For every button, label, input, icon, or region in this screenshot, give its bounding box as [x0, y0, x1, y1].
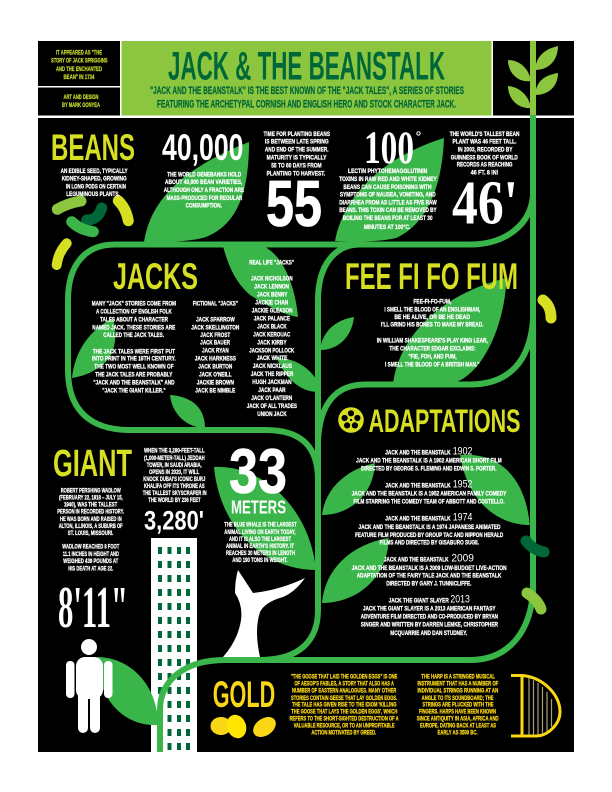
text: jeddah tower: TOWER, IN SAUDI ARABIA,: [147, 462, 202, 469]
heading: jacks: JACKS: [113, 256, 198, 297]
vine stem over tower: [160, 660, 240, 752]
list: real life jacks: JACK LENNON: [254, 284, 289, 291]
text: fee fi fo fum verse: [377, 298, 488, 369]
text: harp: [417, 674, 499, 737]
text: toxin: LECTIN PHYTOHEMAGGLUTININ: [348, 168, 427, 175]
icon: skyscraper: [151, 538, 197, 752]
stat: 46 feet: 46': [452, 169, 518, 237]
text: jeddah tower: WHEN THE 3,280-FEET-TALL: [144, 448, 205, 455]
text: adaptations list: DIRECTED BY GEORGE S. FLEMING AND EDWIN S. PORTER.: [361, 465, 496, 472]
text: adaptations list: 1974: [453, 512, 472, 524]
text: adaptations list: JACK AND THE BEANSTALK IS A 1902 AMERICAN SHORT FILM: [356, 457, 502, 464]
text: adaptations list: JACK THE GIANT SLAYER: [389, 598, 449, 605]
text: wadlow: ROBERT PERSHING WADLOW: [61, 487, 121, 494]
text: planting time: MATURITY IS TYPICALLY: [267, 154, 327, 161]
text: wadlow: 11.1 INCHES IN HEIGHT AND: [63, 551, 119, 558]
icon: film reel: [338, 407, 364, 433]
heading: fee fi fo fum: FEE FI FO FUM: [345, 256, 518, 297]
text: adaptations list: JACK AND THE BEANSTALK: [385, 482, 451, 489]
list: fictional jacks: JACKIE BROWN: [197, 380, 234, 387]
text: beans description: [61, 168, 128, 198]
text: planting time: IS BETWEEN LATE SPRING: [265, 139, 329, 146]
text: genebanks: ABOUT 40,000 BEAN VARIETIES,: [165, 179, 242, 186]
text: fee fi fo fum verse: I SMELL THE BLOOD OF AN ENGLISHMAN,: [384, 306, 480, 313]
text: blue whale: [224, 522, 297, 564]
list: real life jacks: JACK BENNY: [257, 292, 288, 299]
list: real life jacks: JACKIE GLEASON: [252, 308, 292, 315]
label: meters: METERS: [231, 496, 286, 517]
list: real life jacks: JACK NICHOLSON: [251, 276, 293, 283]
text: adaptations list: [352, 445, 507, 637]
text: blue whale: AND 190 TONS IN WEIGHT.: [232, 557, 287, 564]
panel: story note: STORY OF JACK SPRIGGINS: [51, 58, 108, 64]
heading: beans: BEANS: [51, 127, 135, 168]
text: tallest bean: 46 FT. 8 IN!: [471, 169, 498, 176]
text: jeddah tower: [143, 448, 207, 504]
text: jack tales: MANY "JACK" STORIES COME FROM: [92, 301, 176, 308]
text: golden goose: ACTION MOTIVATED BY GREED.: [311, 730, 376, 737]
panel: title header: [122, 41, 492, 116]
text: harp: EUROPE, DATING BACK AT LEAST AS: [420, 723, 496, 730]
list: fictional jacks: [191, 301, 239, 395]
text: adaptations list: FILMS AND DIRECTED BY GISABURO SUGII.: [380, 540, 479, 547]
list: real life jacks: HUGH JACKMAN: [252, 379, 292, 386]
text: tallest bean: GUINNESS BOOK OF WORLD: [451, 154, 518, 161]
stat: 40,000: 40,000: [162, 127, 244, 168]
list: real life jacks: JACK WHITE: [257, 355, 288, 362]
stat: 33: 33: [229, 437, 287, 507]
text: golden goose: NUMBER OF EASTERN ANALOGUES. MANY OTHER: [292, 688, 396, 695]
heading: gold: GOLD: [213, 674, 275, 715]
text: jeddah tower: (1,000-METER-TALL) JEDDAH: [144, 455, 205, 462]
list: real life jacks: [247, 260, 297, 418]
stat: 55: 55: [266, 167, 322, 240]
text: adaptations list: JACK AND THE BEANSTALK: [385, 449, 451, 456]
text: genebanks: [164, 172, 244, 210]
list: real life jacks: JACK THE RIPPER: [251, 371, 293, 378]
heading: adaptations: ADAPTATIONS: [368, 403, 520, 439]
list: fictional jacks: JACK FROST: [200, 332, 231, 339]
text: fee fi fo fum verse: "FIE, FOH, AND FUM,: [408, 353, 457, 360]
text: toxin: [339, 168, 437, 231]
text: wadlow: WADLOW REACHED 8 FOOT: [62, 544, 120, 551]
text: planting time: 55 TO 60 DAYS FROM: [271, 162, 322, 169]
text: adaptations list: FILM STARRING THE COMEDY TEAM OF ABBOTT AND COSTELLO.: [353, 499, 505, 506]
list: real life jacks: JACK NICKLAUS: [253, 363, 292, 370]
text: adaptations list: 2009: [451, 553, 474, 565]
text: genebanks: CONSUMPTION.: [186, 203, 222, 210]
text: toxin: MINUTES AT 100°C.: [364, 223, 410, 231]
text: genebanks: THE WORLD GENEBANKS HOLD: [167, 172, 241, 179]
text: adaptations list: JACK THE GIANT SLAYER IS A 2013 AMERICAN FANTASY: [363, 606, 496, 613]
stat: 3,280 feet: 3,280': [144, 506, 204, 536]
text: tallest bean: IN 2003, RECORDED BY: [458, 147, 513, 154]
text: wadlow: WEIGHED 439 POUNDS AT: [63, 558, 119, 565]
text: toxin: SYMPTOMS OF NAUSEA, VOMITING, AND: [340, 192, 436, 199]
text: blue whale: REACHES 30 METERS IN LENGTH: [226, 550, 295, 557]
text: golden goose: THE GOOSE THAT LAYS THE GOLDEN EGGS', WHICH: [291, 709, 397, 716]
text: jeddah tower: THE WORLD BY 236 FEET: [148, 497, 201, 504]
text: jack tales: "JACK THE GIANT KILLER.": [102, 388, 166, 395]
beans decoration: [57, 201, 551, 609]
text: golden goose: REFERS TO THE SHORT-SIGHTED DESTRUCTION OF A: [290, 716, 399, 723]
text: wadlow: PERSON IN RECORDED HISTORY.: [57, 509, 124, 516]
list: fictional jacks: JACK SKELLINGTON: [191, 324, 239, 331]
text: golden goose: "THE GOOSE THAT LAID THE GOLDEN EGGS" IS ONE: [291, 674, 398, 681]
icon: harp: [511, 676, 560, 736]
panel: credits: [38, 88, 120, 116]
text: fee fi fo fum verse: BE HE ALIVE, OR BE HE DEAD: [394, 314, 470, 321]
list: real life jacks: JACK BLACK: [257, 323, 287, 330]
text: beans description: LEGUMINOUS PLANTS.: [66, 191, 120, 198]
text: tallest bean: PLANT WAS 46 FEET TALL.: [452, 139, 517, 146]
text: toxin: BEANS. THIS TOXIN CAN BE REMOVED BY: [339, 207, 437, 214]
text: planting time: TIME FOR PLANTING BEANS: [264, 131, 330, 138]
text: harp: INSTRUMENT THAT HAS A NUMBER OF: [417, 681, 498, 688]
list: fictional jacks: JACK O'NEILL: [199, 372, 232, 379]
text: jeddah tower: THE TALLEST SKYSCRAPER IN: [143, 490, 207, 497]
text: adaptations list: JACK AND THE BEANSTALK IS A 2009 LOW-BUDGET LIVE-ACTION: [352, 565, 507, 572]
leaf behind person: [97, 657, 158, 725]
text: blue whale: ANIMAL LIVING ON EARTH TODAY,: [224, 529, 296, 536]
list: real life jacks: JACK OF ALL TRADES: [247, 403, 297, 410]
text: tallest bean: [450, 131, 519, 176]
text: adaptations list: FEATURE FILM PRODUCED BY GROUP TAC AND NIPPON HERALD: [355, 532, 503, 539]
icon: person: [66, 639, 112, 733]
text: harp: SINCE ANTIQUITY IN ASIA, AFRICA AND: [417, 716, 499, 723]
panel: credits: BY MARK GONYEA: [62, 102, 100, 109]
text: adaptations list: JACK AND THE BEANSTALK: [384, 557, 449, 564]
text: blue whale: AND IT IS ALSO THE LARGEST: [229, 536, 292, 543]
stat: 100 degrees: 100: [364, 122, 414, 174]
text: harp: THE HARP IS A STRINGED MUSICAL: [421, 674, 495, 681]
text: harp: ANGLE TO ITS SOUNDBOARD; THE: [422, 695, 494, 702]
text: golden goose: VALUABLE RESOURCE, OR TO AN UNPROFITABLE: [294, 723, 395, 730]
text: adaptations list: DIRECTED BY GARY J. TUNNICLIFFE.: [386, 581, 472, 588]
text: adaptations list: ADVENTURE FILM DIRECTED AND CO-PRODUCED BY BRYAN: [361, 614, 498, 621]
text: adaptations list: 1902: [453, 445, 472, 457]
text: planting time: AND END OF THE SUMMER.: [265, 147, 329, 154]
text: adaptations list: JACK AND THE BEANSTALK: [385, 516, 451, 523]
beanstalk vines: [68, 115, 533, 660]
text: harp: STRINGS ARE PLUCKED WITH THE: [422, 702, 494, 709]
text: beans description: IN LONG PODS ON CERTAIN: [66, 184, 126, 191]
text: adaptations list: ADAPTATION OF THE FAIRY TALE JACK AND THE BEANSTALK: [357, 573, 501, 580]
leaves: [72, 138, 530, 603]
list: fictional jacks: JACK RYAN: [202, 348, 229, 355]
text: wadlow: 1940), WAS THE TALLEST: [64, 502, 118, 509]
text: toxin: BOILING THE BEANS FOR AT LEAST 30: [343, 215, 433, 222]
text: adaptations list: 2013: [450, 594, 470, 606]
text: jack tales: A COLLECTION OF ENGLISH FOLK: [96, 308, 172, 315]
text: planting time: [264, 131, 330, 177]
icon: whale tail: [223, 570, 305, 657]
text: wadlow: (FEBRUARY 22, 1918 – JULY 15,: [59, 495, 123, 502]
list: real life jacks: JACKSON POLLOCK: [249, 347, 294, 354]
text: wadlow: ALTON, ILLINOIS, A SUBURB OF: [59, 523, 123, 530]
text: harp: FINGERS. HARPS HAVE BEEN KNOWN: [419, 709, 496, 716]
text: jack tales: THE JACK TALES ARE PROBABLY: [95, 372, 173, 379]
list: fictional jacks: JACK HARKNESS: [195, 356, 236, 363]
text: jack tales: NAMED JACK. THESE STORIES ARE: [92, 324, 176, 331]
text: fee fi fo fum verse: FEE-FI-FO-FUM,: [413, 298, 451, 305]
text: golden goose: OF AESOP'S FABLES, A STORY THAT ALSO HAS A: [294, 681, 394, 688]
text: toxin: TOXINS IN RAW RED AND WHITE KIDNEY: [339, 176, 437, 183]
text: golden goose: THE TALE HAS GIVEN RISE TO THE IDIOM 'KILLING: [292, 702, 397, 709]
text: adaptations list: JACK AND THE BEANSTALK IS A 1974 JAPANESE ANIMATED: [358, 524, 501, 531]
text: jeddah tower: KNOCK DUBAI'S ICONIC BURJ: [143, 476, 205, 483]
text: jack tales: [92, 301, 176, 395]
subtitle: [150, 85, 464, 110]
list: real life jacks: UNION JACK: [257, 411, 287, 418]
panel: story note: [38, 41, 120, 86]
text: toxin: BEANS CAN CAUSE POISONING WITH: [343, 184, 431, 191]
text: tallest bean: THE WORLD'S TALLEST BEAN: [450, 131, 519, 138]
text: jack tales: "JACK AND THE BEANSTALK" AND: [93, 380, 175, 387]
panel: stalk top with leaves: [493, 41, 574, 116]
text: wadlow: HIS DEATH AT AGE 22.: [68, 565, 113, 572]
text: adaptations list: JACK AND THE BEANSTALK IS A 1952 AMERICAN FAMILY COMEDY: [352, 491, 507, 498]
list: fictional jacks: FICTIONAL "JACKS": [193, 301, 238, 308]
list: fictional jacks: JACK BURTON: [198, 364, 232, 371]
icon: golden eggs: [210, 712, 280, 741]
text: fee fi fo fum verse: I SMELL THE BLOOD OF A BRITISH MAN.": [385, 362, 479, 369]
panel: story note: BEAN" IN 1734: [64, 74, 95, 81]
text: golden goose: STORIES CONTAIN GEESE THAT LAY GOLDEN EGGS.: [291, 695, 397, 702]
text: beans description: AN EDIBLE SEED, TYPICALLY: [61, 168, 128, 175]
text: planting time: PLANTING TO HARVEST.: [267, 170, 325, 177]
text: tallest bean: RECORDS AS REACHING: [457, 162, 512, 169]
text: jack tales: TALES ABOUT A CHARACTER: [100, 317, 168, 324]
list: real life jacks: REAL LIFE "JACKS": [249, 260, 294, 267]
panel: story note: IT APPEARED AS "THE: [56, 50, 102, 56]
text: wadlow: ST. LOUIS, MISSOURI.: [68, 530, 113, 537]
stat: 8 foot 11: 8'11": [58, 574, 128, 640]
list: real life jacks: JACK O'LANTERN: [251, 395, 292, 402]
text: adaptations list: 1952: [453, 478, 472, 490]
list: fictional jacks: JACK SPARROW: [196, 317, 235, 324]
text: jack tales: THE JACK TALES WERE FIRST PUT: [93, 348, 176, 355]
text: wadlow: [57, 487, 124, 572]
text: jack tales: CALLED THE JACK TALES.: [103, 332, 164, 339]
text: wadlow: HE WAS BORN AND RAISED IN: [60, 516, 122, 523]
text: genebanks: MASS-PRODUCED FOR REGULAR: [167, 195, 242, 202]
list: real life jacks: JACK KIRBY: [257, 339, 287, 346]
text: fee fi fo fum verse: IN WILLIAM SHAKESPEARE'S PLAY KING LEAR,: [377, 338, 488, 345]
text: jack tales: INTO PRINT IN THE 19TH CENTURY.: [92, 356, 176, 363]
text: adaptations list: SINGER AND WRITTEN BY DARREN LEMKE, CHRISTOPHER: [361, 622, 498, 629]
text: fee fi fo fum verse: I'LL GRIND HIS BONES TO MAKE MY BREAD.: [381, 322, 484, 329]
text: blue whale: THE BLUE WHALE IS THE LARGEST: [224, 522, 297, 529]
list: real life jacks: JACK PAAR: [258, 387, 286, 394]
text: jeddah tower: KHALIFA OFF ITS THRONE AS: [144, 483, 205, 490]
list: fictional jacks: JACK BE NIMBLE: [195, 388, 236, 395]
text: jeddah tower: OPENS IN 2020, IT WILL: [149, 469, 199, 476]
list: fictional jacks: JACK BAUER: [200, 340, 230, 347]
text: blue whale: ANIMAL IN EARTH'S HISTORY. IT: [226, 543, 295, 550]
text: harp: EARLY AS 3500 BC.: [437, 730, 478, 737]
panel: credits: ART AND DESIGN: [64, 94, 99, 101]
panel: story note: AND THE ENCHANTED: [56, 66, 102, 73]
text: jack tales: THE TWO MOST WELL KNOWN OF: [94, 364, 174, 371]
list: real life jacks: JACK KEROUAC: [253, 331, 290, 338]
text: golden goose: [290, 674, 399, 737]
text: toxin: DIARRHEA FROM AS LITTLE AS FIVE RAW: [339, 199, 437, 206]
list: real life jacks: JACKIE CHAN: [255, 300, 288, 307]
text: harp: INDIVIDUAL STRINGS RUNNING AT AN: [417, 688, 498, 695]
text: genebanks: ALTHOUGH ONLY A FRACTION ARE: [164, 187, 244, 194]
text: adaptations list: MCQUARRIE AND DAN STUDNEY.: [390, 630, 467, 637]
heading: giant: GIANT: [53, 443, 132, 485]
text: fee fi fo fum verse: THE CHARACTER EDGAR EXCLAIMS:: [389, 346, 476, 353]
background black panel: [38, 118, 574, 752]
text: beans description: KIDNEY-SHAPED, GROWING: [62, 176, 127, 183]
list: real life jacks: JACK PALANCE: [254, 315, 290, 322]
